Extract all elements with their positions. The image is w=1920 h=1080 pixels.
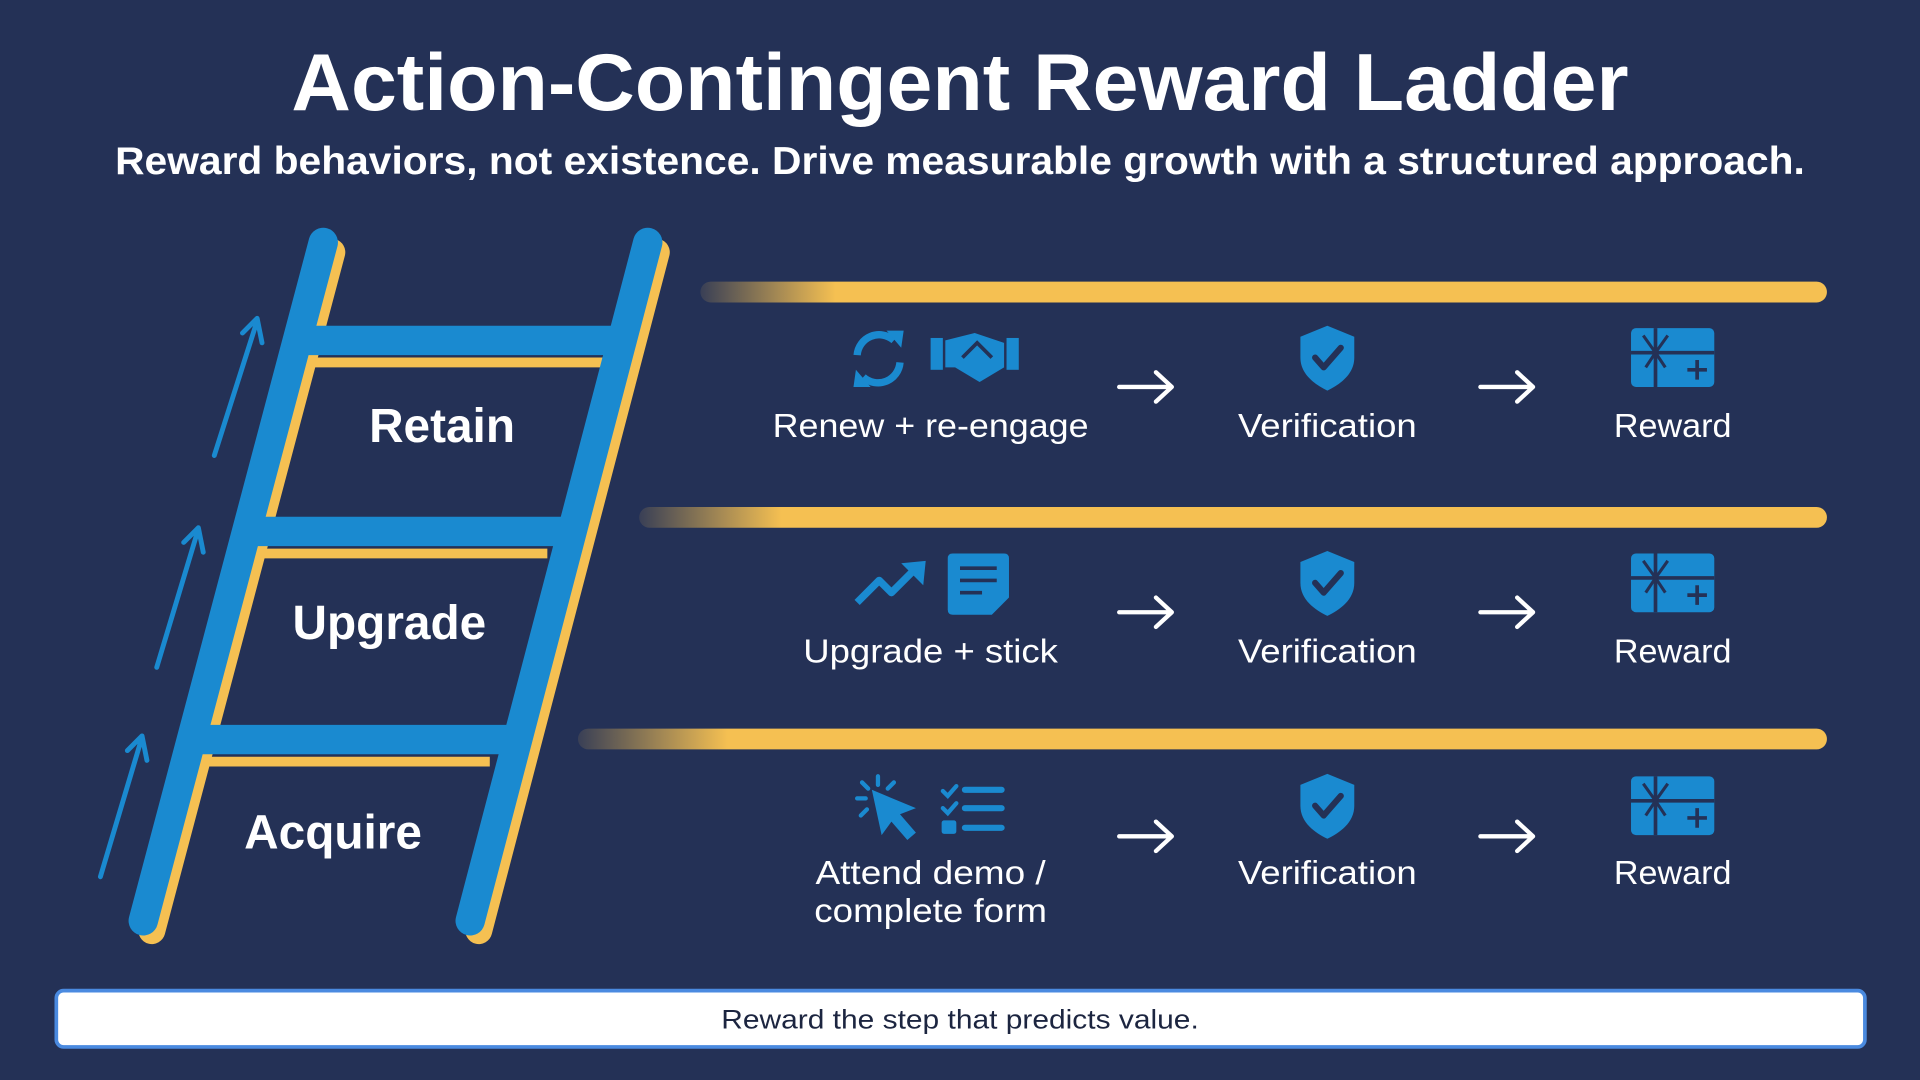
icon: trend [857,568,916,602]
subtitle: Reward behaviors, not existence. Drive measurable growth with a structured approach. [115,140,1805,183]
footer callout: Reward the step that predicts value. [721,1005,1199,1035]
icon: document [948,553,1009,615]
icon: cursor [872,790,916,840]
row: upgrade: Upgrade + stick [803,633,1058,670]
icon: checklist [943,786,956,813]
row: acquire [814,774,1731,930]
yellow bars [578,282,1827,749]
label: Retain: Retain [369,400,515,453]
row: upgrade: Reward [1614,633,1731,670]
progress arrows [100,318,262,877]
row: retain [773,326,1731,445]
row: retain: Renew + re-engage [773,408,1089,445]
row: retain: Reward [1614,408,1731,445]
row: retain: Verification [1238,408,1417,445]
footer callout [56,991,1865,1047]
row: acquire: Verification [1238,855,1417,892]
label: Acquire: Acquire [244,807,422,860]
label: Upgrade: Upgrade [293,597,486,650]
row: acquire: Reward [1614,855,1731,892]
row: acquire: complete form [814,893,1047,930]
row: acquire: Attend demo / [816,855,1047,892]
title: Action-Contingent Reward Ladder [291,38,1629,128]
icon: handshake [931,333,1019,382]
row: upgrade: Verification [1238,633,1417,670]
ladder [143,242,656,931]
row: upgrade [803,551,1731,670]
icon: renew [857,335,900,383]
